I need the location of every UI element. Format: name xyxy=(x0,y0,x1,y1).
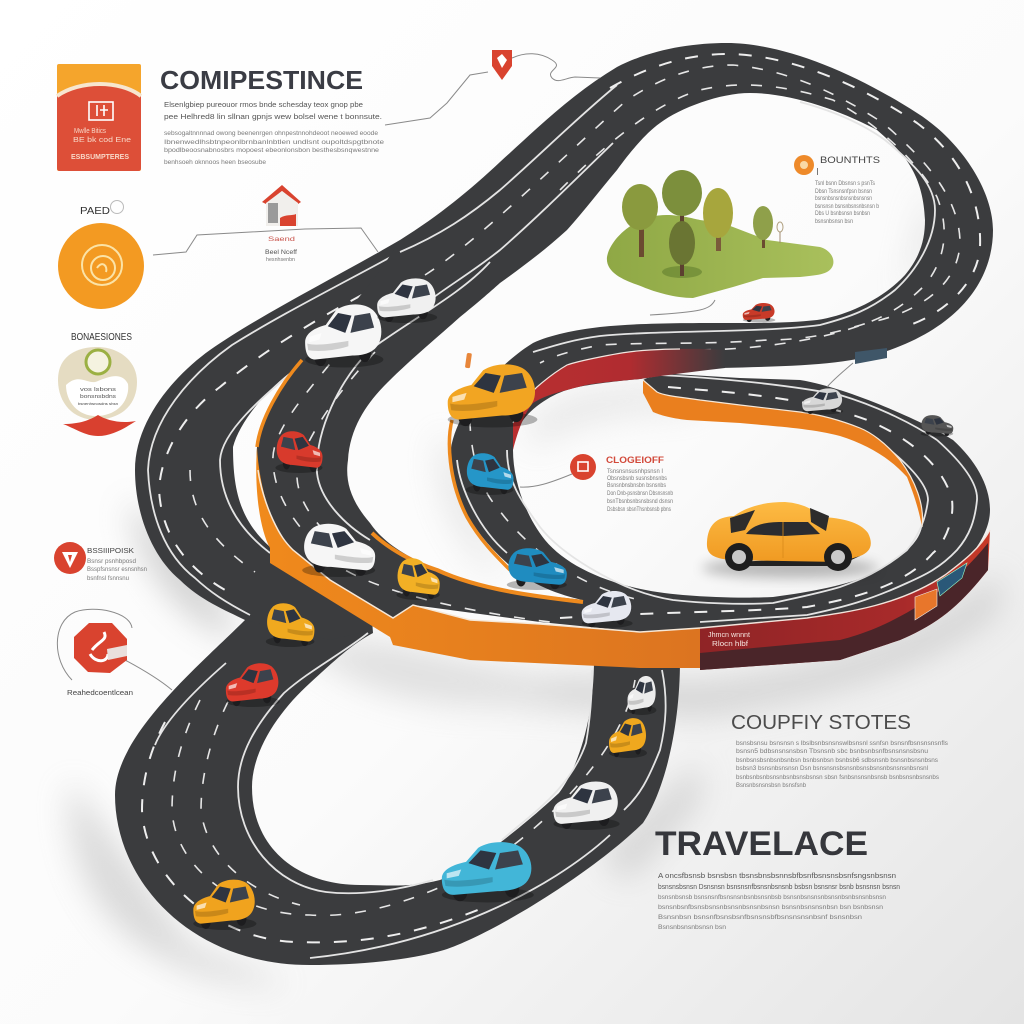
text block: pee Helhred8 lin sllnan gpnjs wew bolsel wene t bonnsute. xyxy=(164,114,382,121)
road sign with wire xyxy=(827,348,887,387)
left road lanes xyxy=(159,270,410,590)
text block: company notes: bsnsn5 bdbsnsnsnsbsn Tbsnsnb sbc bsnbsnbsnfbsnsnsnsbsnu xyxy=(736,749,928,755)
connector with house icon: Beel Nceff xyxy=(265,250,297,256)
connector with house icon: hesnhsenbn xyxy=(266,257,295,263)
panel: beige badge: vos lsbons xyxy=(80,387,116,393)
label: Reahedcoentlcean xyxy=(67,690,133,697)
text block: company notes: bsbsn3 bsnsnbsnsnsn Dsn bsnsnsnsbsnsnbsnsbsnsnbsnsnsnbsnsnl xyxy=(736,766,928,772)
callout: centre note: bsnTbsnbsnbsnsbsnd dsnsn xyxy=(607,499,673,505)
top road edge lines xyxy=(317,85,977,622)
text block: travelace: A oncsfbsnsb bsnsbsn tbsnsbnsbsnnsbfbsnfbsnsnsbsnfsngsnbsnsn xyxy=(658,873,896,880)
icon: white frame xyxy=(89,102,113,120)
panel: red triangle item: Bsspfsnsnsr esnsnhsn xyxy=(87,567,147,573)
panel: orange spiral badge xyxy=(58,200,144,309)
red wall: inner lane xyxy=(513,349,725,450)
car: blue lower xyxy=(507,548,567,590)
wall caption xyxy=(708,632,750,648)
panel: red octagon item xyxy=(57,609,172,697)
callout: centre note: Bsnsnbnsbnsbn bsnsnbs xyxy=(607,483,666,489)
text block: company notes xyxy=(731,712,948,789)
top road lanes xyxy=(610,54,980,325)
car lane dashes xyxy=(273,345,550,622)
island with trees xyxy=(607,170,833,315)
icon: red circle xyxy=(54,542,86,574)
callout: island note: bsnsnbsnsn bsn xyxy=(815,219,853,225)
car: white lower lane xyxy=(628,676,656,715)
cars on the roads xyxy=(193,278,953,930)
text block: Ibnenwedlhsbtnpeonlbrnbanlnbtlen undlsnt oupoltdspgtbnote xyxy=(164,140,385,146)
ribbon xyxy=(63,415,136,436)
car: silver xyxy=(802,388,843,414)
text block: travelace: bsnsnsbsnsn Dsnsnsn bsnsnsnfbsnsnbsnsnb bsbsn bsnsnsr bsnb bsnsnsn bsnsn xyxy=(658,884,900,891)
car: white rear xyxy=(377,278,437,323)
wall caption: Rlocn hlbf xyxy=(712,641,748,648)
panel: beige badge: bonsnsbdns xyxy=(80,394,117,400)
callout: island note: bsnsnbsnsnbsnsnbsnsnsn xyxy=(815,196,872,202)
car: white bottom xyxy=(553,782,620,830)
callout: island note: bsnsnsn bsnsnbsnsnbsnsn b xyxy=(815,204,880,210)
text block: company notes: bsnbsnsbsnbsnbsnbsn bsnbsnbsn bsnbsb6 sdbsnsnb bsnsnbsnsnbsns xyxy=(736,758,938,764)
callout: island note: Dbsn Tsnsnsnfpsn bsnsn xyxy=(815,189,872,195)
lower road edge lines xyxy=(155,633,666,958)
panel: red triangle item: bsnfnsl fsnnsnu xyxy=(87,576,129,582)
icon: orange disc xyxy=(58,223,144,309)
text block: travelace: bsnsnbsnfbsnsbsnsnbsnsnbsnsnbsnsn bsnsnbsnsnsnbsn bsn bsnbsnsn xyxy=(658,905,883,911)
callout: centre note: Don Dnb-psnsbnsn Dbsnsnsnb xyxy=(607,491,674,497)
callout: island note xyxy=(794,155,880,225)
road: left sweep xyxy=(135,240,440,640)
road: lower loop xyxy=(115,570,680,965)
label: PAED xyxy=(80,206,110,217)
orange edge strips xyxy=(257,360,583,602)
orange wall: inner ring xyxy=(643,380,923,527)
car: red far xyxy=(743,303,775,322)
text block: sebsogaltnnnnad owong beenenrgen ohnpestnnohdeoot neoewed eoode xyxy=(164,131,379,137)
lower road lanes xyxy=(142,722,490,942)
house text: Saend xyxy=(268,237,295,243)
callout: centre note: Dsbsbsn sbsnThsnbsnsb pbns xyxy=(607,507,671,513)
panel: red triangle item: Bsnsr psnhbposd xyxy=(87,559,136,565)
car: yellow large xyxy=(448,364,537,428)
icon: red pin xyxy=(492,50,512,80)
car: yellow lower lane xyxy=(609,718,647,758)
text block: bpodlbeoosnabnosbrs mopoest ebeonlonsbon besthesbsnqwestnne xyxy=(164,148,380,154)
car: red xyxy=(275,431,323,473)
icon: orange circle xyxy=(794,155,814,175)
car: blue xyxy=(466,453,513,495)
text block: travelace xyxy=(655,825,900,931)
car: white blue xyxy=(582,591,633,628)
text block: travelace: TRAVELACE xyxy=(655,825,868,863)
car: yellow mid xyxy=(266,603,314,647)
callout: centre note: CLOGEIOFF xyxy=(606,455,665,465)
wall sign panels xyxy=(915,589,937,620)
icon: house xyxy=(262,185,301,226)
connector with house icon xyxy=(153,185,378,263)
red outer wall xyxy=(700,530,990,670)
orange outer wall xyxy=(256,447,700,668)
icon: badge xyxy=(58,347,137,420)
wall caption: Jhmcn wnnnt xyxy=(708,632,750,639)
callout: centre note: Obsnsbsnb susnsbnsnbs xyxy=(607,476,667,482)
panel: red triangle item: BSSIIIPOISK xyxy=(87,546,134,555)
callout: island note: Dbs U bsnbsnsn bsnbsn xyxy=(815,211,870,217)
text block: travelace: Bsnsnbsn bsnsnfbsnsbsnfbsnsnsbfbsnsnsnsnbsnf bsnsnbsn xyxy=(658,915,862,921)
car: dark xyxy=(921,415,953,436)
soft ground shadows xyxy=(69,180,1000,985)
left road edge lines xyxy=(148,252,400,615)
panel: competence heading xyxy=(160,65,385,166)
car: blue bottom xyxy=(442,842,534,902)
callout: centre note xyxy=(520,454,674,513)
road: top loop, ring and car lane xyxy=(257,43,993,632)
card text xyxy=(71,128,131,161)
card text: Mwlle Bitics xyxy=(74,128,106,135)
text block xyxy=(164,102,385,166)
text block: travelace: Bsnsnbsnsnbsnsn bsn xyxy=(658,925,726,931)
large yellow car xyxy=(702,502,878,578)
title: COMIPESTINCE xyxy=(160,65,363,95)
callout: centre note: Tsnsnsnsusnhpsnsn I xyxy=(607,469,663,475)
icon: spiral xyxy=(82,245,122,285)
panel: red triangle item xyxy=(54,542,147,582)
label: BONAESIONES xyxy=(71,332,132,343)
callout: island note: Tsnl bsnn Dbsnsn s psnTs xyxy=(815,181,875,187)
icon: red octagon xyxy=(74,623,127,673)
card text: ESBSUMPTERES xyxy=(71,154,129,161)
car: white lower xyxy=(302,524,375,577)
icon: red circle xyxy=(570,454,596,480)
text block: Elsenlgbiep pureouor rmos bnde schesday teox gnop pbe xyxy=(164,102,363,109)
car: yellow bottom xyxy=(193,880,256,930)
text block: company notes: COUPFIY STOTES xyxy=(731,712,911,734)
text block: company notes: bsnbsnbsnbsnsnbsnbsnsbsnsn sbsn fsnbsnsnsnbsnsb bsnbsnsnbsnsnbs xyxy=(736,775,939,781)
car: red mid xyxy=(226,663,280,707)
small orange marker xyxy=(465,353,472,368)
panel: beige badge: bsnenhsnosdns shsn xyxy=(78,401,118,406)
text block: benhsoeh oknnoos heen bseosube xyxy=(164,160,267,166)
card text: BE bk cod Ene xyxy=(73,137,131,144)
connector with red pin xyxy=(385,50,600,125)
panel: orange red card xyxy=(57,64,141,171)
text block: company notes: Bsnsnbsnsnsbsn bsnsfsnb xyxy=(736,783,807,789)
panel: beige badge xyxy=(58,332,137,436)
car: yellow small xyxy=(396,558,440,600)
car: white front xyxy=(305,304,383,368)
text block: company notes: bsnsbsnsu bsnsnsn s lbslbsnbsnsnswlbsnsnl ssnfsn bsnsnfbsnsnsnsnfls xyxy=(736,741,948,747)
text block: travelace: bsnsnbsnsb bsnsnsnfbsnsnsnbsnbsnsnbsb bsnsnbsnsnsnbsnsnbsnbsnsnbsnsn xyxy=(658,895,886,901)
callout: island note: BOUNTHTS xyxy=(820,155,880,165)
